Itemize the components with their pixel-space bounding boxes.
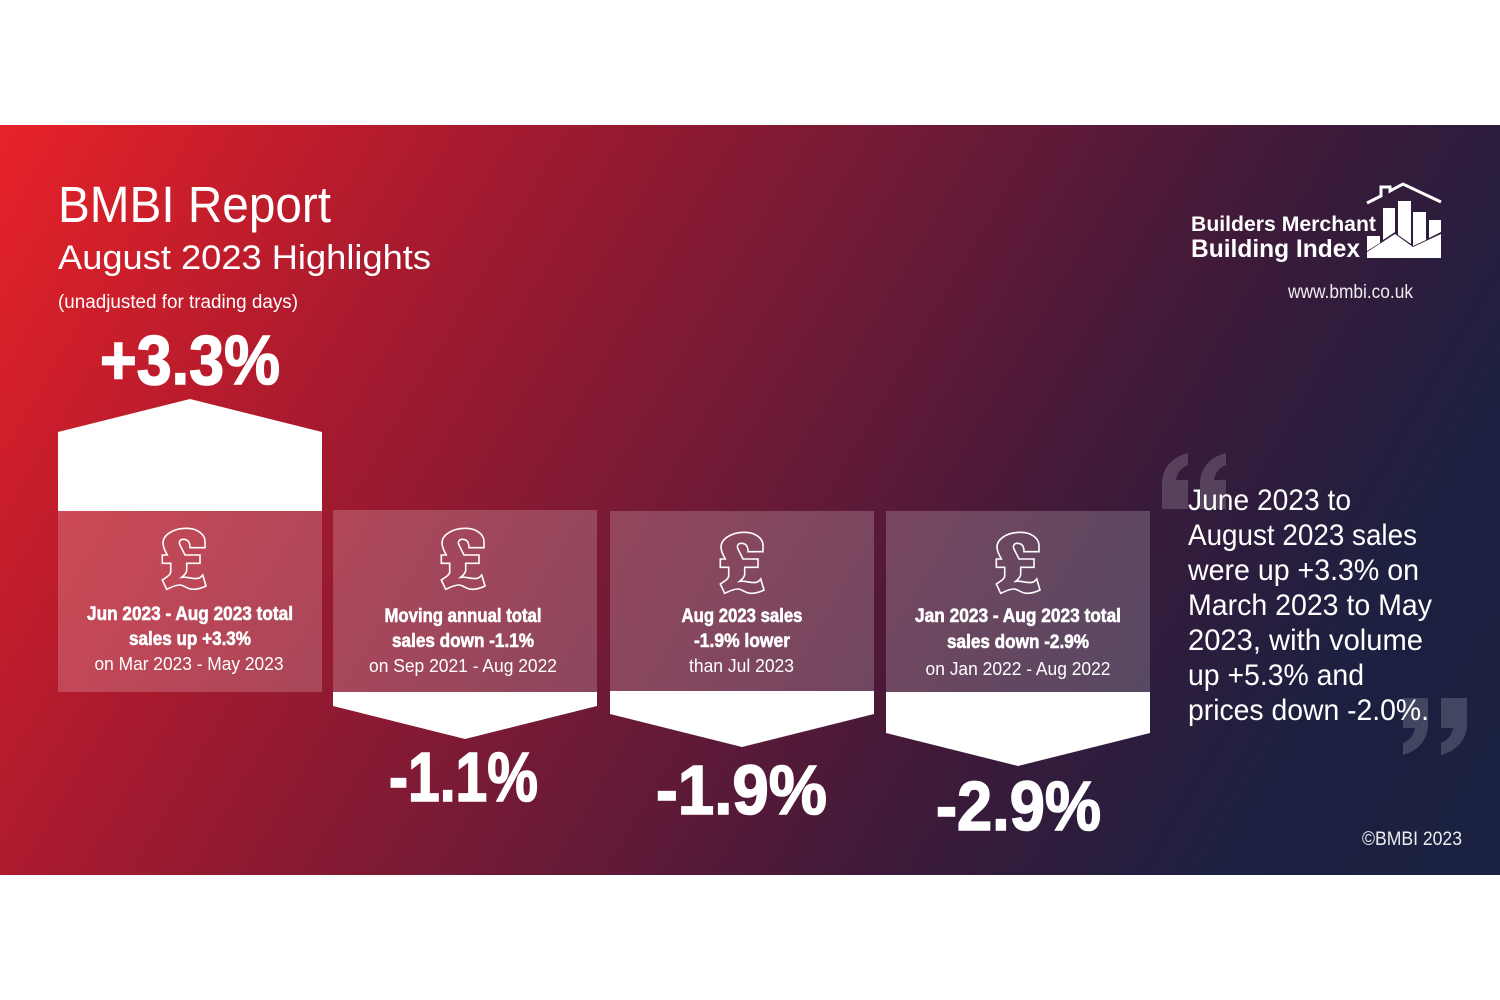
panel: three month sales bbox=[58, 321, 322, 692]
panel: moving annual total: sales down -1.1% bbox=[392, 630, 534, 652]
panel: year to date: sales down -2.9% bbox=[947, 631, 1089, 653]
icon: opening quote bbox=[1162, 453, 1226, 509]
panel: year to date bbox=[886, 511, 1150, 845]
icon: pound bbox=[441, 528, 485, 589]
card text: Jan 2023 - Aug 2023 total bbox=[915, 605, 1121, 627]
card bbox=[886, 511, 1150, 692]
logo wordmark: Builders Merchant bbox=[1191, 213, 1376, 236]
logo building bars bbox=[1367, 201, 1441, 251]
logo bbox=[1191, 184, 1441, 263]
panel: three month sales: on Mar 2023 - May 2023 bbox=[94, 654, 284, 674]
quote text: prices down -2.0%. bbox=[1188, 694, 1429, 727]
value: -1.1%: -1.1% bbox=[389, 738, 538, 816]
card text: Jun 2023 - Aug 2023 total bbox=[87, 603, 293, 625]
quote text: 2023, with volume bbox=[1188, 624, 1423, 657]
title: BMBI Report bbox=[58, 176, 331, 233]
icon: pound bbox=[162, 528, 206, 589]
card text: Aug 2023 sales bbox=[682, 605, 803, 627]
down arrow bbox=[333, 692, 597, 739]
down arrow bbox=[886, 692, 1150, 766]
quote text: March 2023 to May bbox=[1188, 589, 1432, 622]
quote text: were up +3.3% on bbox=[1187, 554, 1419, 587]
logo roof bbox=[1367, 184, 1441, 203]
panel: monthly sales: -1.9% lower bbox=[694, 630, 790, 652]
card bbox=[58, 511, 322, 692]
down arrow bbox=[610, 691, 874, 747]
value: +3.3%: +3.3% bbox=[100, 321, 280, 399]
value: -1.9%: -1.9% bbox=[656, 751, 827, 829]
icon: closing quote bbox=[1403, 698, 1467, 755]
panel: monthly sales: than Jul 2023 bbox=[689, 656, 794, 676]
quote text: August 2023 sales bbox=[1188, 519, 1417, 552]
panel: monthly sales bbox=[610, 511, 874, 829]
card text: Moving annual total bbox=[384, 605, 542, 627]
copyright: ©BMBI 2023 bbox=[1362, 828, 1462, 850]
website: www.bmbi.co.uk bbox=[1287, 281, 1413, 303]
icon: pound bbox=[720, 532, 764, 593]
value: -2.9%: -2.9% bbox=[936, 767, 1101, 845]
card bbox=[610, 511, 874, 691]
panel: moving annual total: on Sep 2021 - Aug 2022 bbox=[369, 656, 557, 676]
quote text: up +5.3% and bbox=[1188, 659, 1364, 692]
logo wordmark second line: Building Index bbox=[1191, 235, 1360, 263]
up arrow bbox=[58, 399, 322, 511]
logo chart base bbox=[1367, 234, 1441, 258]
quote text: June 2023 to bbox=[1188, 484, 1351, 517]
icon: pound bbox=[996, 532, 1040, 593]
subtitle: August 2023 Highlights bbox=[58, 239, 431, 277]
card bbox=[333, 510, 597, 692]
panel: year to date: on Jan 2022 - Aug 2022 bbox=[926, 659, 1110, 679]
quote text bbox=[1187, 484, 1432, 727]
panel: moving annual total bbox=[333, 510, 597, 816]
panel: three month sales: sales up +3.3% bbox=[129, 628, 251, 650]
background band bbox=[0, 125, 1500, 875]
note: unadjusted: (unadjusted for trading days) bbox=[58, 292, 298, 313]
